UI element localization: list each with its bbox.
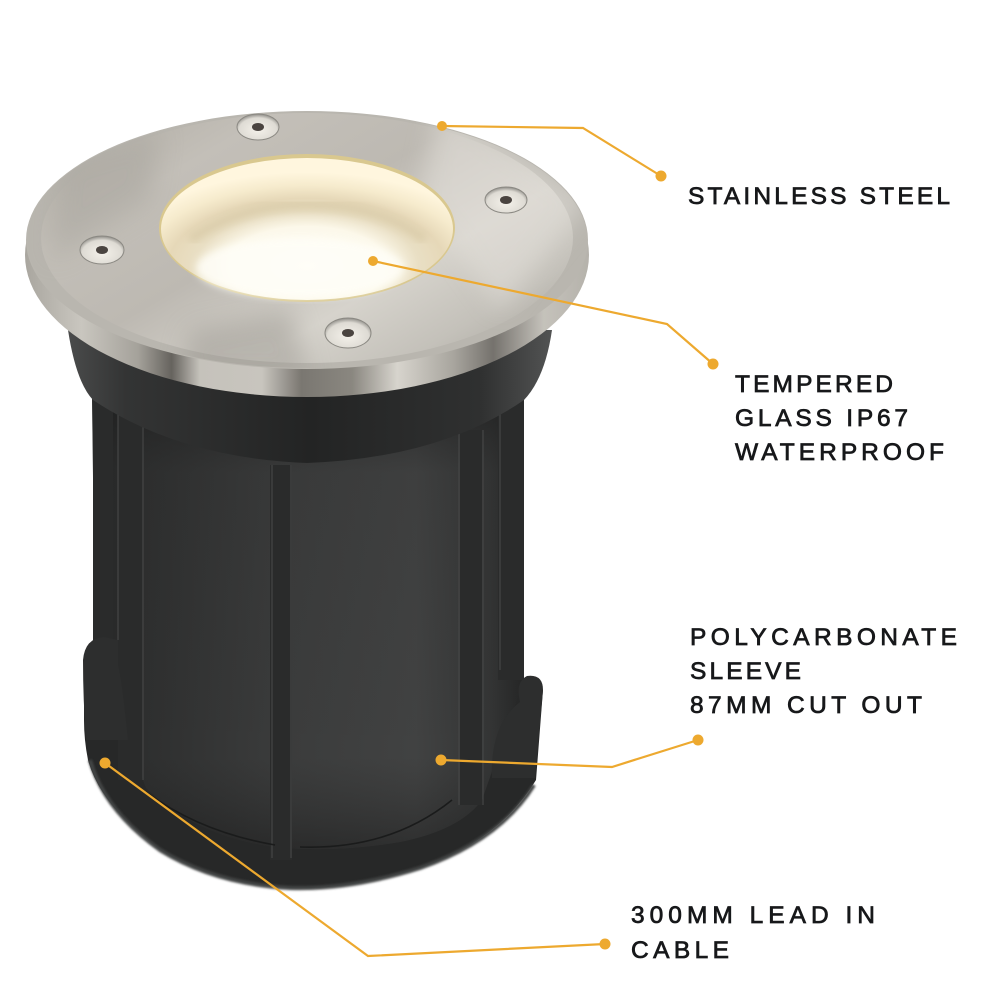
label: tempered glass	[735, 371, 944, 466]
ears	[83, 637, 543, 778]
callout line: tempered glass	[368, 256, 718, 370]
product: ground light	[25, 100, 590, 888]
label: polycarbonate sleeve	[690, 624, 957, 719]
screws	[80, 114, 527, 348]
polycarbonate sleeve body	[92, 390, 524, 860]
label: lead in cable: 300MM LEAD IN	[631, 902, 875, 929]
label: polycarbonate sleeve: SLEEVE	[690, 658, 801, 685]
base flange	[84, 637, 543, 888]
glass opening	[159, 154, 455, 302]
stainless steel rim	[25, 113, 589, 397]
ribs	[93, 395, 524, 860]
label: polycarbonate sleeve: 87MM CUT OUT	[690, 692, 922, 719]
label: stainless steel: STAINLESS STEEL	[688, 183, 950, 210]
label: tempered glass: GLASS IP67	[735, 405, 908, 432]
callout line: stainless steel	[437, 121, 666, 182]
infographic	[25, 111, 956, 958]
collar	[68, 330, 552, 463]
label: polycarbonate sleeve: POLYCARBONATE	[690, 624, 957, 651]
callout line: polycarbonate sleeve	[436, 734, 704, 767]
label: tempered glass: TEMPERED	[735, 371, 893, 398]
callout line: lead in cable	[100, 758, 610, 956]
label: tempered glass: WATERPROOF	[735, 439, 944, 466]
stainless steel face	[26, 111, 588, 369]
label: lead in cable	[631, 902, 875, 964]
label: lead in cable: CABLE	[631, 937, 729, 964]
